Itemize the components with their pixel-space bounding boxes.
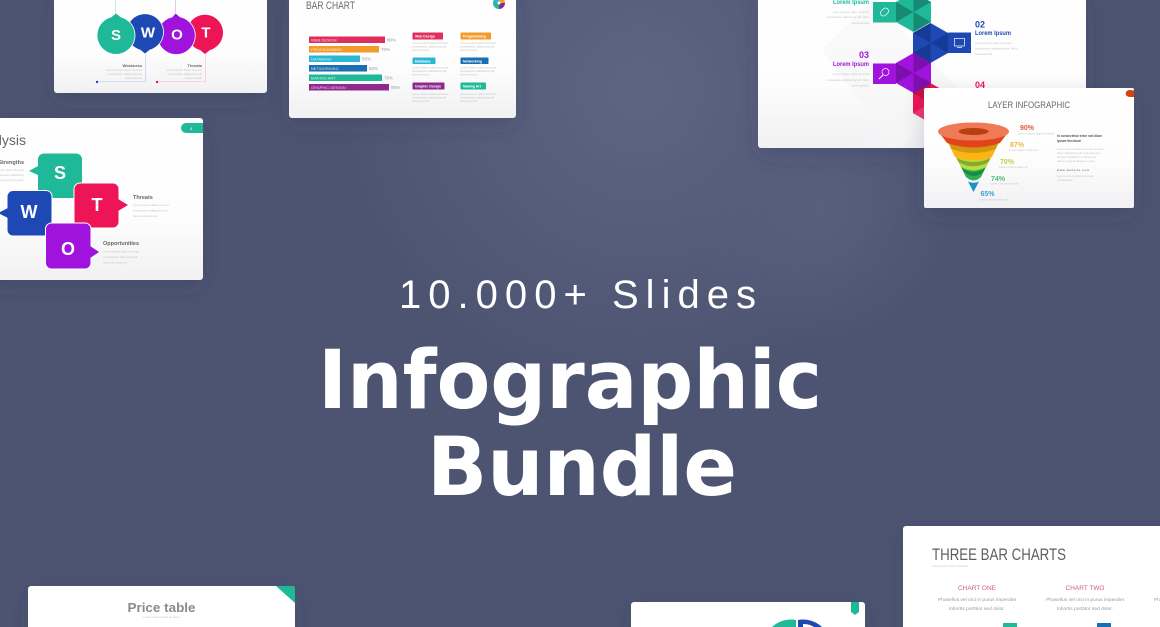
percent labels: 70% [1000,159,1015,166]
icon tile blue [948,32,971,53]
decorative diamond [822,0,960,148]
hexagon green [896,0,931,32]
step 03 text: Lorem ipsum dolor sit amet [833,72,869,76]
badge W: W [141,24,156,42]
badge O [157,13,195,55]
description text: Ipsum tincidunt [1057,139,1082,143]
step 04 number: 04 [975,80,985,90]
skill tag: Graphic Design: sed eiusmod [412,99,429,103]
percent captions: Lorem ipsum dolor sit [1009,148,1038,152]
skill tag: Programming: Lorem ipsum dolor sit amet [460,41,496,45]
bar chart: WEB DESIGN [311,38,337,42]
connector lines [97,0,206,82]
heading: BAR CHART [306,0,355,12]
description text: tempor incididunt ut labore et [1057,155,1096,159]
bar: green [1003,623,1017,627]
dot: blue [96,81,98,83]
heading: Price table [128,601,196,615]
step 01 text [827,0,869,25]
skill tag: Database: consectetur adipiscing elit [412,69,447,73]
label: Threats [133,195,169,218]
label: Threats: Threats [133,195,153,201]
badge T: T [201,24,211,42]
step 02 text: 02 [975,20,985,30]
column: chart two: CHART TWO [1065,585,1105,592]
label: Threats [166,63,203,80]
bar values: 60% [369,66,378,71]
bar values: 70% [381,47,390,52]
step 02 text [975,20,1018,56]
dot: red [156,81,158,83]
donut chart [772,620,822,627]
column: chart two [1046,585,1125,611]
label: Weakness [106,63,143,80]
skill tag: Web Design: consectetur adipiscing elit [412,44,447,48]
description text: dolore magna aliqua ut enim [1057,159,1095,163]
bar values [362,38,400,90]
step 03 text: 03 [859,50,869,60]
block O: O [61,239,75,259]
panel: SWOT analysis slide [0,118,203,280]
label: Opportunities: Nam sed eiusmod [103,260,128,264]
corner ribbon [276,586,295,603]
corner badge [1126,90,1134,97]
icon tile green [873,2,896,22]
percent captions: Lorem ipsum dolor sit [979,198,1008,202]
skill tag: Database [412,58,448,76]
subheading: Lorem ipsum dolor sit amet [932,564,968,568]
label: Threats: consectetur adipiscing elit [133,208,168,212]
block S: S [54,163,66,183]
title: Infographic [318,334,822,428]
step 01 text: consectetur adipiscing elit. Nam [827,15,869,19]
step 03 text: sed eiusmod [852,84,869,88]
skill tag: Programming: Programming [463,34,486,38]
heading: THREE BAR CHARTS [932,546,1066,564]
bar chart: GRAPHIC DESIGN [311,85,346,90]
skill tag: Networking [460,58,496,76]
panel: price table slide [28,586,295,627]
panel: three bar charts slide [903,526,1160,627]
percent labels [980,125,1035,198]
description text: www.website.com [1057,168,1090,172]
skill tag: Web Design: Web Design [415,34,435,38]
block S [29,154,82,198]
hexagon red [913,83,948,123]
step 03 text [827,50,869,88]
panel: bar chart slide [289,0,516,118]
title: Bundle [427,421,737,515]
step 01 text: Lorem ipsum dolor sit amet [833,10,869,14]
description text [1057,134,1104,182]
hexagon purple [896,53,931,93]
heading: LAYER INFOGRAPHIC [988,100,1070,110]
percent captions: Lorem ipsum dolor sit amet [1018,132,1054,136]
bar chart: PROGRAMMING [311,47,342,52]
label: Weakness: sed eiusmod [125,76,142,80]
step 02 text: sed eiusmod [975,52,992,56]
label: Threats: consectetur adipiscing elit [168,72,202,76]
skill tag: Web Design: sed eiusmod [412,48,429,52]
bar values: 55% [362,56,371,62]
percent labels: 74% [991,176,1006,183]
step 01 text: sed eiusmod [852,21,869,25]
label: Weakness: Weakness [122,63,143,68]
block W: W [20,202,38,222]
column: chart one: lobortis porttitor sed dolor. [949,606,1005,611]
percent captions [979,132,1054,202]
label: Opportunities: consectetur adipiscing elit [103,255,138,259]
skill tag: Networking: Networking [463,59,482,63]
panel: hexagon steps slide [758,0,1086,148]
skill tag: Making Art: Lorem ipsum dolor sit amet [460,92,496,96]
bar values: 85% [391,85,400,90]
skill tag: Web Design: Lorem ipsum dolor sit amet [412,41,448,45]
badge S: S [111,27,121,44]
panel: donut chart slide [631,602,865,627]
title [318,334,822,515]
description text: Lorem ipsum dolor sit amet consec [1057,147,1104,151]
skill tag: Networking: consectetur adipiscing elit [460,69,495,73]
skill tag: Graphic Design: Graphic Design [415,84,441,88]
skill tag: Graphic Design [412,82,448,103]
description text: Lorem ipsum dolor sit amet [1057,174,1093,178]
label: Threats: Lorem ipsum dolor sit amet [166,68,202,72]
skill tag: Graphic Design: Lorem ipsum dolor sit amet [412,92,448,96]
percent captions: Lorem ipsum dolor sit [999,165,1028,169]
label: Threats: sed eiusmod [185,76,202,80]
label: Opportunities: Opportunities [103,241,139,247]
step 01 text: Lorem Ipsum [833,0,869,6]
skill tag: Database: sed eiusmod [412,72,429,76]
label: Threats: Lorem ipsum dolor sit amet [133,203,169,207]
panel: SWOT circles slide [54,0,267,93]
bar values: 78% [384,76,393,80]
label: Weakness: consectetur adipiscing elit [108,72,142,76]
step 03 text: Lorem Ipsum [833,62,869,68]
description text: consectetur [1057,178,1073,182]
label: Weakness: Lorem ipsum dolor sit amet [106,68,142,72]
hexagon blue [913,23,948,63]
percent labels: 90% [1020,125,1035,132]
logo wheel [493,0,505,9]
skill tag: Database: Lorem ipsum dolor sit amet [412,66,448,70]
skill tag: Web Design [412,32,448,52]
skill tag: Making Art: consectetur adipiscing elit [460,96,495,100]
step 02 text: consectetur adipiscing elit. Nam [975,46,1018,50]
percent captions: Lorem ipsum dolor sit [990,182,1019,186]
skill tag: Database: Database [415,59,431,63]
corner tag: 4 [190,126,193,131]
block T [74,183,129,228]
step 02 text: Lorem Ipsum [975,31,1011,37]
column: chart one: CHART ONE [958,585,997,592]
skill tag: Programming: sed eiusmod [460,48,477,52]
block O [46,223,100,269]
label: Opportunities: Lorem ipsum dolor sit amet [103,250,139,254]
column: chart one [938,585,1017,611]
percent labels: 65% [980,191,995,198]
step 02 text: Lorem ipsum dolor sit amet [975,41,1011,45]
skill tag: Networking: sed eiusmod [460,72,477,76]
bar chart [309,36,389,90]
panel: layer infographic slide [924,88,1134,208]
skill tag: Networking: Lorem ipsum dolor sit amet [460,66,496,70]
description text: In consectetur enim sed diam [1057,134,1102,138]
skill tag: Making Art: Making Art [463,84,482,88]
funnel chart [938,122,1009,192]
percent labels: 87% [1010,142,1025,149]
subheading: Lorem ipsum dolor sit amet [143,615,180,619]
label: Strengths [0,160,24,182]
subtitle: 10.000+ Slides [399,273,756,317]
bar chart: NETWORKING [311,66,339,71]
skill tag: Graphic Design: consectetur adipiscing elit [412,96,447,100]
label: Opportunities [103,241,139,264]
badge S [97,13,135,54]
block T: T [92,195,102,215]
badge W [127,14,164,54]
skill tag: Programming [460,32,496,52]
icon tile purple [873,64,896,84]
label: Threats: Nam sed eiusmod [133,214,158,218]
column: chart two: lobortis porttitor sed dolor. [1057,606,1113,611]
block W [0,190,52,236]
label: Threats: Threats [188,63,203,68]
skill tag: Making Art: sed eiusmod [460,99,477,103]
description text: Nam adipiscing elit sed eiusmod [1057,151,1100,155]
ribbon tag [851,602,859,615]
badge O: O [171,26,183,44]
bar values: 80% [387,38,396,42]
bar: blue [1097,623,1111,627]
corner tag [181,123,203,133]
bar chart: DATABASE [311,56,332,62]
column: chart two: Phasellus vel orci in purus imperdiet [1046,597,1125,602]
skill tag: Making Art [460,82,496,103]
step 03 text: consectetur adipiscing elit. Nam [827,78,869,82]
bar chart: MAKING ART [311,76,336,80]
column: chart one: Phasellus vel orci in purus imperdiet [938,597,1017,602]
skill tag: Programming: consectetur adipiscing elit [460,44,495,48]
badge T [187,15,223,54]
